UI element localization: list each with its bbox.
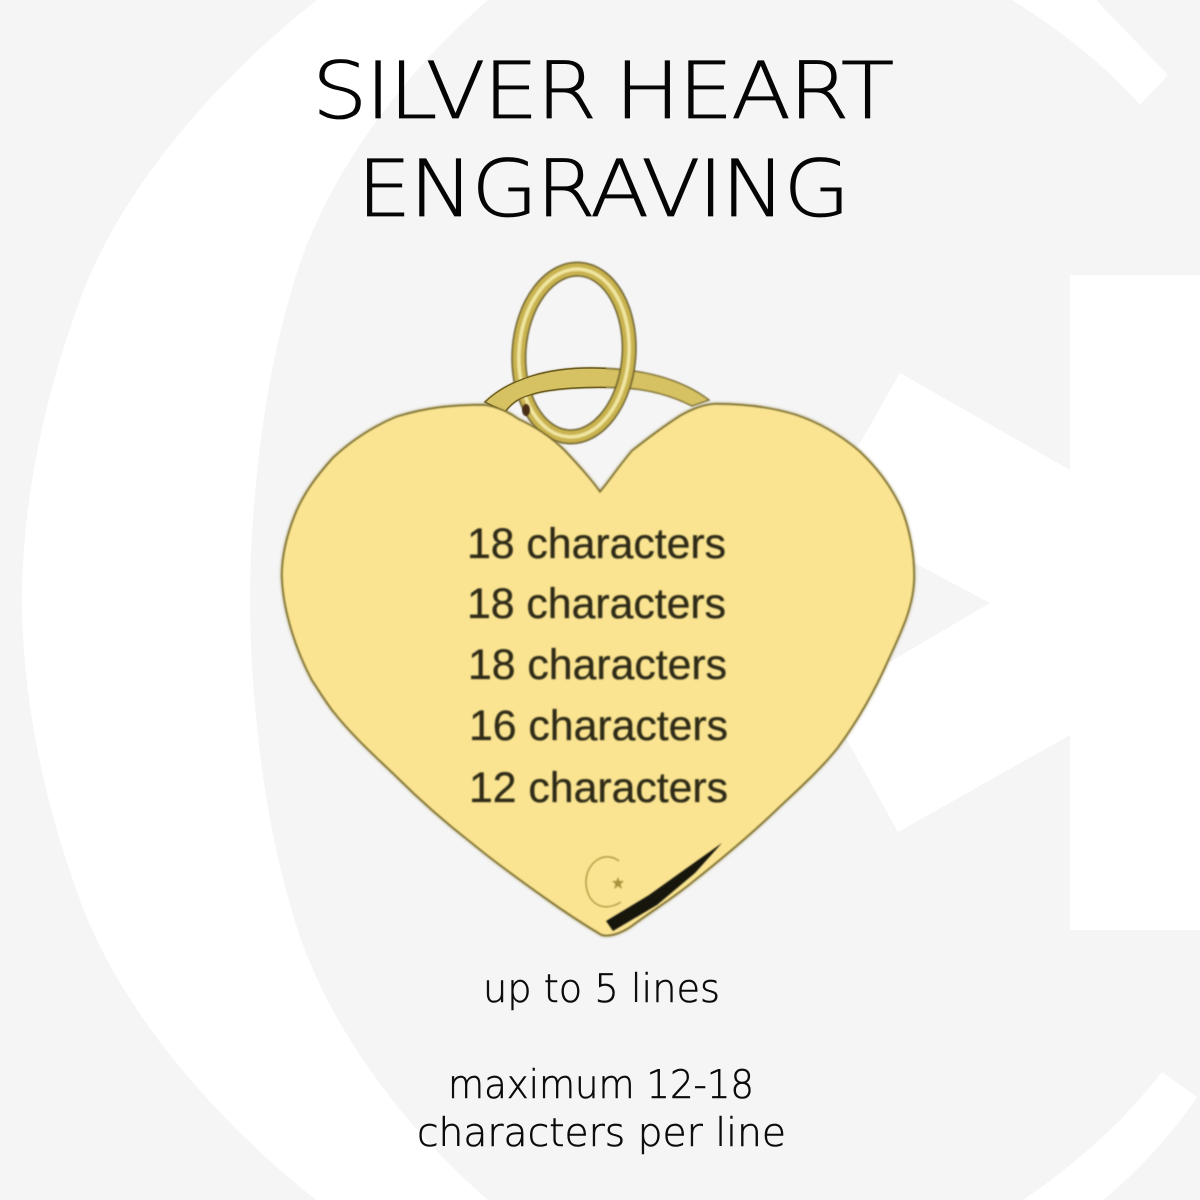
- caption: character limit: maximum 12-18: [448, 1063, 754, 1108]
- jump ring: [513, 265, 635, 441]
- title: SILVER HEART: [312, 47, 892, 137]
- engraved text lines: 18 characters: [468, 641, 727, 689]
- title: [312, 47, 892, 235]
- engraved text lines: 12 characters: [469, 764, 728, 812]
- maker's mark: [586, 857, 624, 907]
- heart shadow: [282, 404, 914, 935]
- heart plate: [282, 404, 914, 935]
- caption: character limit: [417, 1063, 786, 1156]
- engraved text lines: 18 characters: [467, 580, 726, 628]
- engraved text lines: [467, 520, 728, 812]
- pendant illustration: [282, 265, 914, 935]
- title: ENGRAVING: [357, 145, 848, 235]
- engraved text lines: 16 characters: [469, 702, 728, 750]
- ring shadow spot: [522, 404, 530, 416]
- caption: character limit: characters per line: [417, 1111, 786, 1156]
- bail arc behind ring: [485, 368, 709, 412]
- caption: line count: up to 5 lines: [483, 967, 720, 1012]
- dark bevel edge: [606, 843, 722, 931]
- engraved text lines: 18 characters: [467, 520, 726, 568]
- bail left segment over ring: [484, 367, 606, 412]
